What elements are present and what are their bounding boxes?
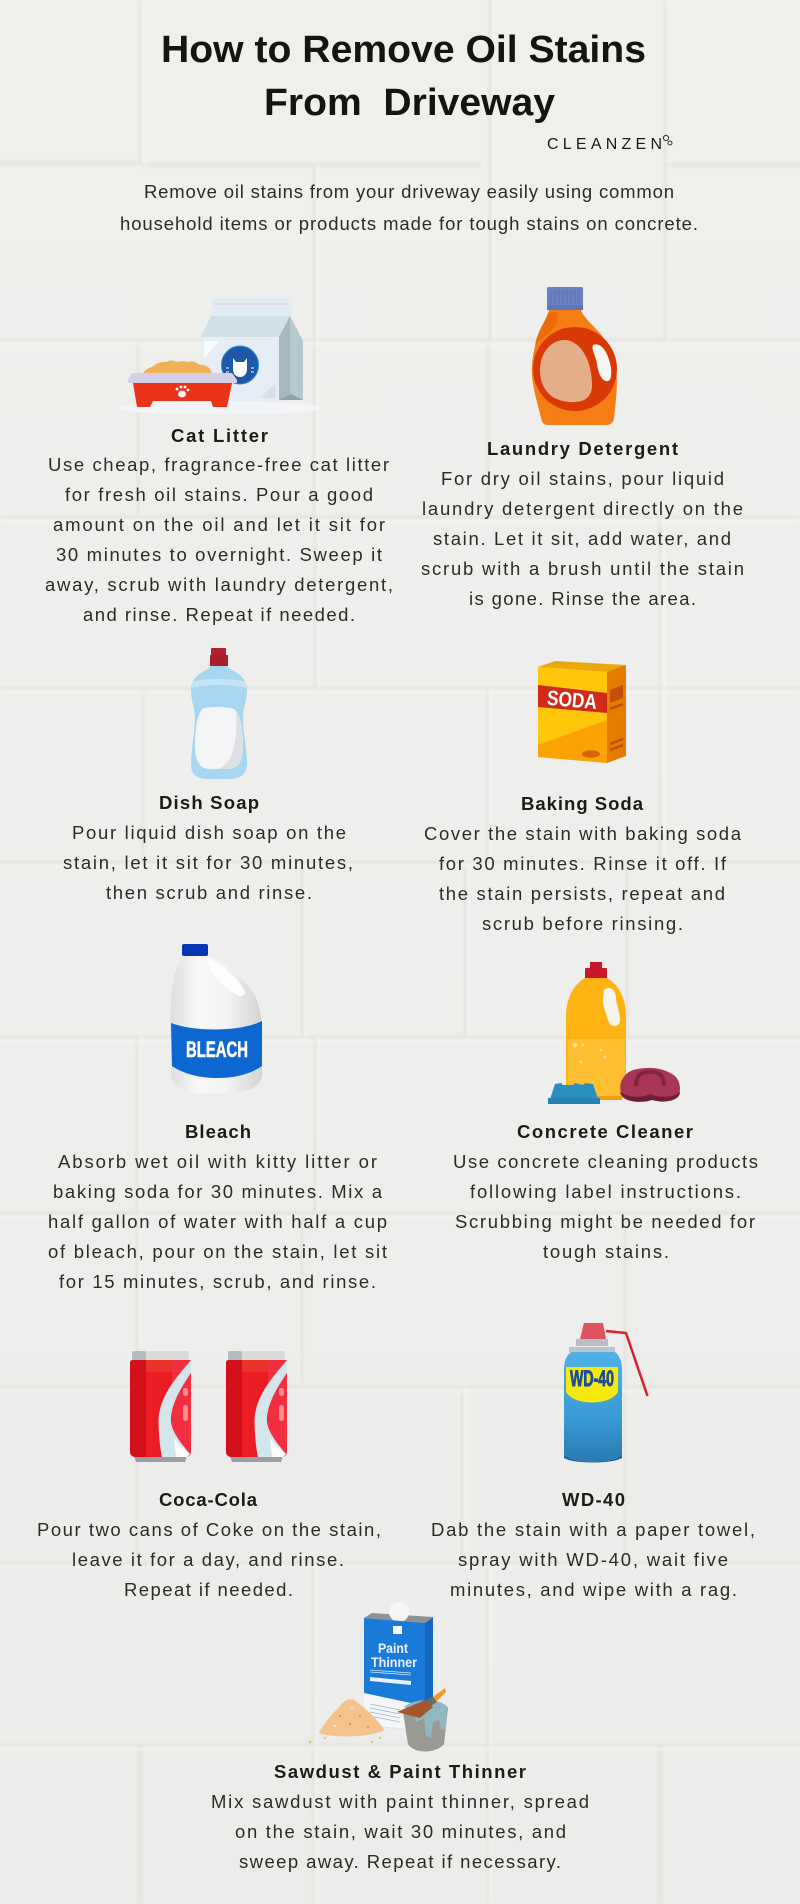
icon: paint thinner can, sawdust, brush and bucket: Paint <box>378 1640 408 1656</box>
panel: baking soda <box>424 661 742 934</box>
text: laundry detergent instructions <box>421 468 744 609</box>
panel: WD-40 <box>431 1323 755 1600</box>
text: dish soap instructions: stain, let it sit for 30 minutes, <box>63 852 353 873</box>
panel: sawdust and paint thinner <box>211 1602 589 1872</box>
text: WD-40 instructions: Dab the stain with a paper towel, <box>431 1519 755 1540</box>
icon: dish soap bottle <box>191 648 247 779</box>
text: concrete cleaner instructions: following label instructions. <box>470 1181 741 1202</box>
icon: cleaner bottle, brush and sponge <box>548 962 680 1104</box>
icon: bleach jug <box>171 944 262 1093</box>
text: WD-40 instructions: spray with WD-40, wait five <box>458 1549 728 1570</box>
icon: soda box <box>538 661 626 763</box>
icon: WD-40 spray can <box>564 1323 648 1462</box>
heading: Bleach: Bleach <box>185 1121 251 1142</box>
intro text <box>120 181 698 234</box>
heading: Coca-Cola: Coca-Cola <box>159 1489 258 1510</box>
heading: Cat Litter: Cat Litter <box>171 425 268 446</box>
text: concrete cleaner instructions: tough stains. <box>543 1241 669 1262</box>
text: cat litter instructions: away, scrub with laundry detergent, <box>45 574 393 595</box>
text: sawdust and paint thinner instructions: Mix sawdust with paint thinner, spread <box>211 1791 589 1812</box>
text: baking soda instructions: the stain persists, repeat and <box>439 883 725 904</box>
panel: coca-cola <box>37 1351 381 1600</box>
panel: concrete cleaner <box>453 962 758 1262</box>
text: bleach instructions <box>48 1151 387 1292</box>
title <box>161 29 646 124</box>
icon: cat litter box and bag <box>119 298 321 414</box>
logo: CLEANZEN: CLEANZEN <box>547 136 662 153</box>
panel: bleach <box>48 944 387 1292</box>
text: laundry detergent instructions: laundry detergent directly on the <box>422 498 743 519</box>
icon: soda box: SODA <box>546 687 598 714</box>
text: baking soda instructions: scrub before rinsing. <box>482 913 683 934</box>
intro text: Remove oil stains from your driveway easily using common <box>144 181 674 202</box>
text: sawdust and paint thinner instructions: on the stain, wait 30 minutes, and <box>235 1821 566 1842</box>
text: laundry detergent instructions: is gone. Rinse the area. <box>469 588 696 609</box>
text: bleach instructions: baking soda for 30 minutes. Mix a <box>53 1181 383 1202</box>
text: coca-cola instructions: leave it for a day, and rinse. <box>72 1549 344 1570</box>
text: bleach instructions: for 15 minutes, scrub, and rinse. <box>59 1271 376 1292</box>
text: bleach instructions: Absorb wet oil with kitty litter or <box>58 1151 377 1172</box>
text: concrete cleaner instructions <box>453 1151 758 1262</box>
heading: Concrete Cleaner: Concrete Cleaner <box>517 1121 693 1142</box>
text: sawdust and paint thinner instructions: sweep away. Repeat if necessary. <box>239 1851 561 1872</box>
text: cat litter instructions <box>45 454 393 625</box>
text: concrete cleaner instructions: Use concrete cleaning products <box>453 1151 758 1172</box>
heading: Dish Soap: Dish Soap <box>159 792 259 813</box>
intro text: household items or products made for tough stains on concrete. <box>120 213 698 234</box>
panel: dish soap <box>63 648 353 903</box>
icon: paint thinner can, sawdust, brush and bucket: Thinner <box>371 1654 417 1670</box>
text: coca-cola instructions: Pour two cans of Coke on the stain, <box>37 1519 381 1540</box>
text: bleach instructions: of bleach, pour on the stain, let sit <box>48 1241 387 1262</box>
icon: paint thinner can, sawdust, brush and bucket <box>308 1602 448 1752</box>
text: coca-cola instructions: Repeat if needed. <box>124 1579 293 1600</box>
text: laundry detergent instructions: stain. Let it sit, add water, and <box>433 528 731 549</box>
icon: two cola cans <box>130 1351 287 1462</box>
text: bleach instructions: half gallon of water with half a cup <box>48 1211 387 1232</box>
text: dish soap instructions: then scrub and rinse. <box>106 882 312 903</box>
text: cat litter instructions: and rinse. Repeat if needed. <box>83 604 355 625</box>
icon: WD-40 spray can: WD-40 <box>570 1366 614 1391</box>
title: From Driveway <box>264 82 555 124</box>
text: WD-40 instructions <box>431 1519 755 1600</box>
heading: Sawdust & Paint Thinner: Sawdust & Paint Thinner <box>274 1761 526 1782</box>
text: sawdust and paint thinner instructions <box>211 1791 589 1872</box>
text: laundry detergent instructions: For dry oil stains, pour liquid <box>441 468 724 489</box>
icon: orange detergent bottle <box>532 287 617 425</box>
icon: bleach jug: BLEACH <box>186 1037 248 1062</box>
heading: WD-40: WD-40 <box>562 1489 625 1510</box>
text: concrete cleaner instructions: Scrubbing might be needed for <box>455 1211 755 1232</box>
text: baking soda instructions <box>424 823 742 934</box>
title: How to Remove Oil Stains <box>161 29 646 71</box>
text: baking soda instructions: for 30 minutes. Rinse it off. If <box>439 853 727 874</box>
text: WD-40 instructions: minutes, and wipe with a rag. <box>450 1579 737 1600</box>
panel: cat litter <box>45 298 393 625</box>
text: cat litter instructions: Use cheap, fragrance-free cat litter <box>48 454 389 475</box>
text: coca-cola instructions <box>37 1519 381 1600</box>
text: laundry detergent instructions: scrub with a brush until the stain <box>421 558 744 579</box>
text: cat litter instructions: 30 minutes to overnight. Sweep it <box>56 544 382 565</box>
text: baking soda instructions: Cover the stain with baking soda <box>424 823 742 844</box>
heading: Laundry Detergent: Laundry Detergent <box>487 438 678 459</box>
text: dish soap instructions: Pour liquid dish soap on the <box>72 822 346 843</box>
panel: laundry detergent <box>421 287 744 609</box>
text: dish soap instructions <box>63 822 353 903</box>
text: cat litter instructions: amount on the oil and let it sit for <box>53 514 385 535</box>
text: cat litter instructions: for fresh oil stains. Pour a good <box>65 484 373 505</box>
heading: Baking Soda: Baking Soda <box>521 793 644 814</box>
